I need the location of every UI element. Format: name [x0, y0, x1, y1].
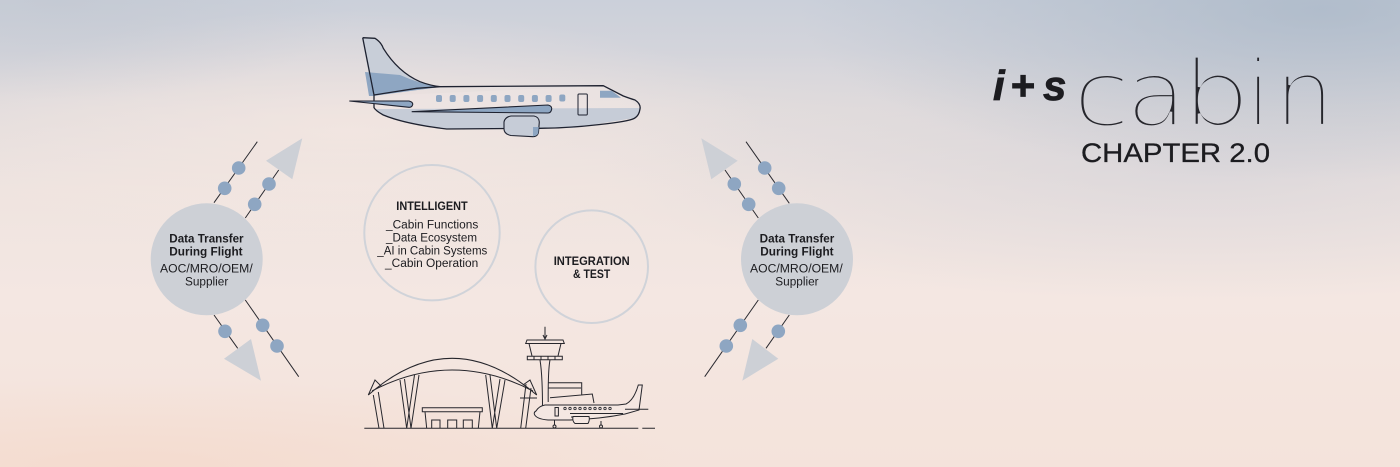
circle: intelligent: _Data Ecosystem: [385, 232, 477, 244]
right data transfer circle: [741, 203, 853, 315]
right upper arrow: [701, 138, 789, 218]
left data transfer circle: [151, 203, 263, 315]
chapter heading: CHAPTER 2.0: [1081, 138, 1270, 168]
cockpit window: [600, 91, 621, 98]
circle: intelligent: _Cabin Functions: [385, 219, 479, 231]
left data transfer circle: During Flight: [169, 247, 243, 259]
left data transfer group: [151, 138, 302, 381]
circle: intelligent: _AI in Cabin Systems: [376, 245, 488, 257]
circle: intelligent: INTELLIGENT: [396, 201, 468, 213]
left data transfer circle: Supplier: [185, 277, 228, 289]
logo word cabin: [1081, 58, 1324, 126]
icon: airplane in flight: [349, 38, 640, 137]
left data transfer circle: AOC/MRO/OEM/: [160, 264, 254, 276]
circle: intelligent: _Cabin Operation: [384, 258, 478, 270]
right lower arrow: [705, 300, 789, 381]
left data transfer circle: Data Transfer: [169, 234, 244, 246]
right data transfer circle: During Flight: [760, 247, 834, 259]
left upper arrow: [214, 138, 302, 218]
wing: [412, 105, 552, 113]
logo mark i+s: i+s: [993, 62, 1066, 109]
left lower arrow: [214, 300, 299, 381]
engine: [504, 116, 539, 137]
right data transfer circle: Supplier: [775, 277, 819, 289]
circle: integration and test: & TEST: [573, 269, 610, 281]
right data transfer group: [701, 138, 853, 381]
tailplane: [349, 101, 413, 107]
circle: integration and test: INTEGRATION: [554, 256, 630, 268]
circle: integration and test: [535, 210, 648, 323]
circle: intelligent: [364, 165, 500, 300]
right data transfer circle: Data Transfer: [760, 234, 835, 246]
right data transfer circle: AOC/MRO/OEM/: [750, 264, 844, 276]
door: [578, 94, 587, 115]
icon: airport with hangar, tower and plane: [364, 327, 655, 428]
logo: i+s cabin: [993, 58, 1324, 126]
cabin windows: [436, 94, 565, 102]
